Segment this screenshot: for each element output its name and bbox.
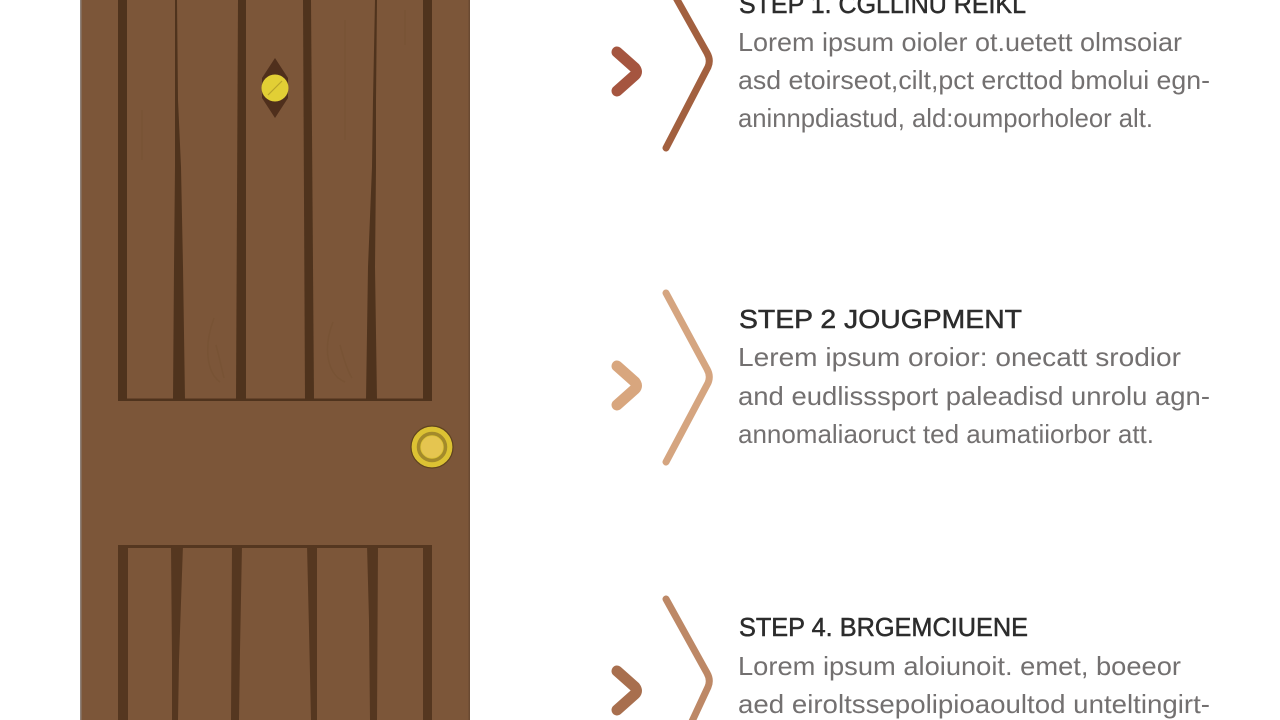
step 1 text: asd etoirseot,cilt,pct ercttod bmolui egn- bbox=[738, 65, 1210, 95]
arrow: step 1 chevrons bbox=[617, 0, 709, 148]
step 3 bbox=[617, 599, 1210, 720]
step 3 text: aed eiroltssepolipioaoultod unteltingirt- bbox=[738, 689, 1210, 719]
step 3 heading: STEP 4. BRGEMCIUENE bbox=[739, 612, 1028, 642]
step 2 text: and eudlisssport paleadisd unrolu agn- bbox=[738, 381, 1210, 411]
step 2 text: Lerem ipsum oroior: onecatt srodior bbox=[738, 342, 1181, 372]
step 2 heading: STEP 2 JOUGPMENT bbox=[739, 304, 1022, 334]
step 1 text bbox=[738, 27, 1210, 133]
step 2 text: annomaliaoruct ted aumatiiorbor att. bbox=[738, 419, 1154, 449]
step 3 text bbox=[738, 651, 1210, 719]
arrow: step 2 chevrons bbox=[617, 293, 709, 462]
wood grain knots bbox=[142, 10, 405, 382]
step 1 bbox=[617, 0, 1210, 148]
icon: keyhole with yellow screw bbox=[262, 58, 288, 118]
step 3 text: Lorem ipsum aloiunoit. emet, boeeor bbox=[738, 651, 1181, 681]
icon: wooden door bbox=[80, 0, 470, 720]
step 2 bbox=[617, 293, 1210, 462]
icon: door knob bbox=[411, 426, 453, 468]
step 1 text: Lorem ipsum oioler ot.uetett olmsoiar bbox=[738, 27, 1182, 57]
door top panel bbox=[118, 0, 432, 401]
step 1 text: aninnpdiastud, ald:oumporholeor alt. bbox=[738, 103, 1153, 133]
arrow: step 3 chevrons bbox=[617, 599, 709, 720]
step 2 text bbox=[738, 342, 1210, 449]
door bottom panel bbox=[118, 545, 432, 720]
